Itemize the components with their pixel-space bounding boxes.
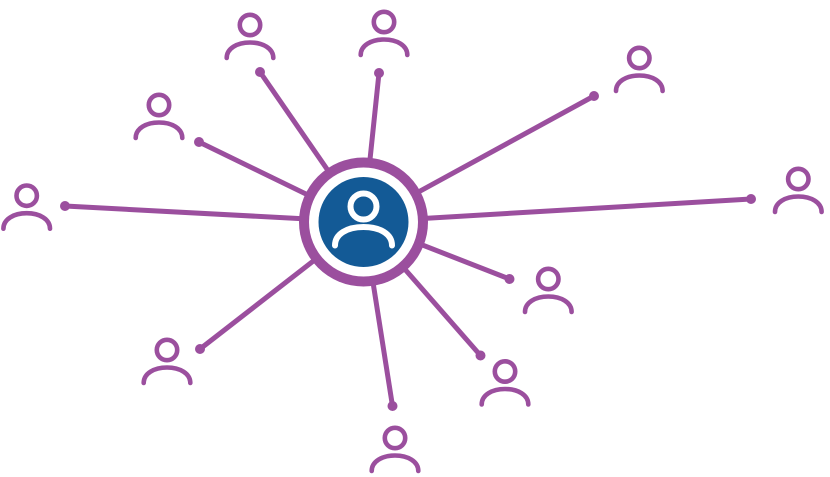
icon: person left xyxy=(3,186,50,229)
icon: person lower left xyxy=(144,340,190,383)
icon: person top left xyxy=(227,15,273,58)
icon: central person xyxy=(335,194,392,246)
icon: person upper left xyxy=(136,95,182,138)
icon: person bottom xyxy=(372,428,418,471)
icon: person bottom right xyxy=(482,361,528,404)
central hub xyxy=(299,158,428,286)
icon: person top xyxy=(361,12,407,55)
icon: person right xyxy=(775,169,822,212)
icon: person upper right xyxy=(616,48,663,91)
icon: person lower right xyxy=(525,269,572,312)
connector lines with end dots xyxy=(60,67,756,411)
